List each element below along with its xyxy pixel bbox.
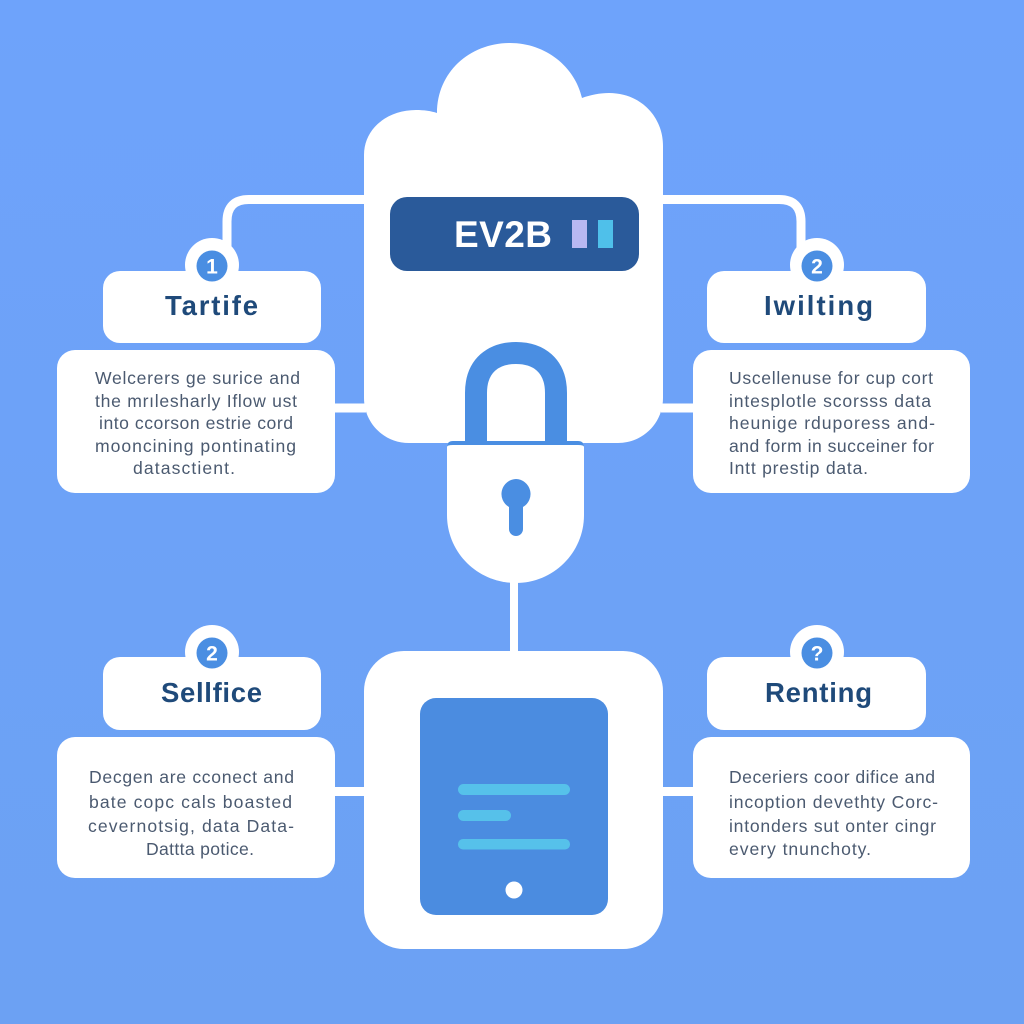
panel: Tartife — [57, 238, 335, 493]
heading card — [707, 271, 926, 343]
label pill: EV2B — [390, 197, 639, 271]
description card: Intt prestip data. — [729, 458, 868, 478]
description card: cevernotsig, data Data- — [88, 816, 294, 836]
description card: datasctient. — [133, 458, 235, 478]
description card: intonders sut onter cingr — [729, 816, 936, 836]
keyhole — [501, 479, 531, 536]
badge backing — [790, 625, 844, 679]
heading card — [707, 657, 926, 730]
description card: bate copc cals boasted — [89, 792, 292, 812]
number badge 2 — [196, 638, 228, 668]
heading card: Iwilting — [764, 290, 873, 321]
question badge — [802, 638, 832, 668]
number badge 1 — [196, 250, 228, 282]
heading card — [103, 657, 321, 730]
description card — [57, 350, 335, 493]
heading card: Tartife — [165, 290, 258, 321]
panel: Renting — [693, 625, 970, 878]
label pill: EV2B: EV2B — [454, 214, 552, 255]
tablet screen — [420, 698, 608, 915]
heading card: Renting — [765, 677, 872, 708]
badge backing — [185, 625, 239, 679]
number badge 1: 1 — [206, 256, 218, 278]
number badge 2 — [802, 250, 832, 282]
heading card — [103, 271, 321, 343]
description card: incoption devethty Corc- — [729, 792, 938, 812]
panel: Iwilting — [693, 238, 970, 493]
panel: Sellfice — [57, 625, 335, 878]
description card: Decgen are cconect and — [89, 767, 294, 787]
question badge: ? — [811, 642, 823, 666]
cloud: central server — [364, 43, 663, 443]
badge backing — [185, 238, 239, 292]
description card: mooncining pontinating — [95, 436, 296, 456]
description card: and form in succeiner for — [729, 436, 934, 456]
description card — [693, 350, 970, 493]
description card: intesplotle scorsss data — [729, 391, 931, 411]
description card: every tnunchoty. — [729, 839, 871, 859]
heading card: Sellfice — [161, 677, 262, 708]
description card: Deceriers coor difice and — [729, 767, 935, 787]
description card — [693, 737, 970, 878]
description card: Uscellenuse for cup cort — [729, 368, 933, 388]
badge backing — [790, 238, 844, 292]
connectors — [227, 200, 801, 792]
padlock shackle — [476, 353, 556, 444]
device card: tablet — [364, 651, 663, 949]
padlock body — [447, 441, 584, 583]
description card: the mrılesharly Iflow ust — [95, 391, 297, 411]
description card: Dattta potice. — [146, 839, 254, 859]
description card: into ccorson estrie cord — [99, 413, 293, 433]
description card — [57, 737, 335, 878]
description card: Welcerers ge surice and — [95, 368, 300, 388]
description card: heunige rduporess and- — [729, 413, 935, 433]
icon: padlock — [447, 353, 584, 583]
number badge 2: 2 — [206, 642, 218, 666]
number badge 2: 2 — [811, 256, 823, 278]
